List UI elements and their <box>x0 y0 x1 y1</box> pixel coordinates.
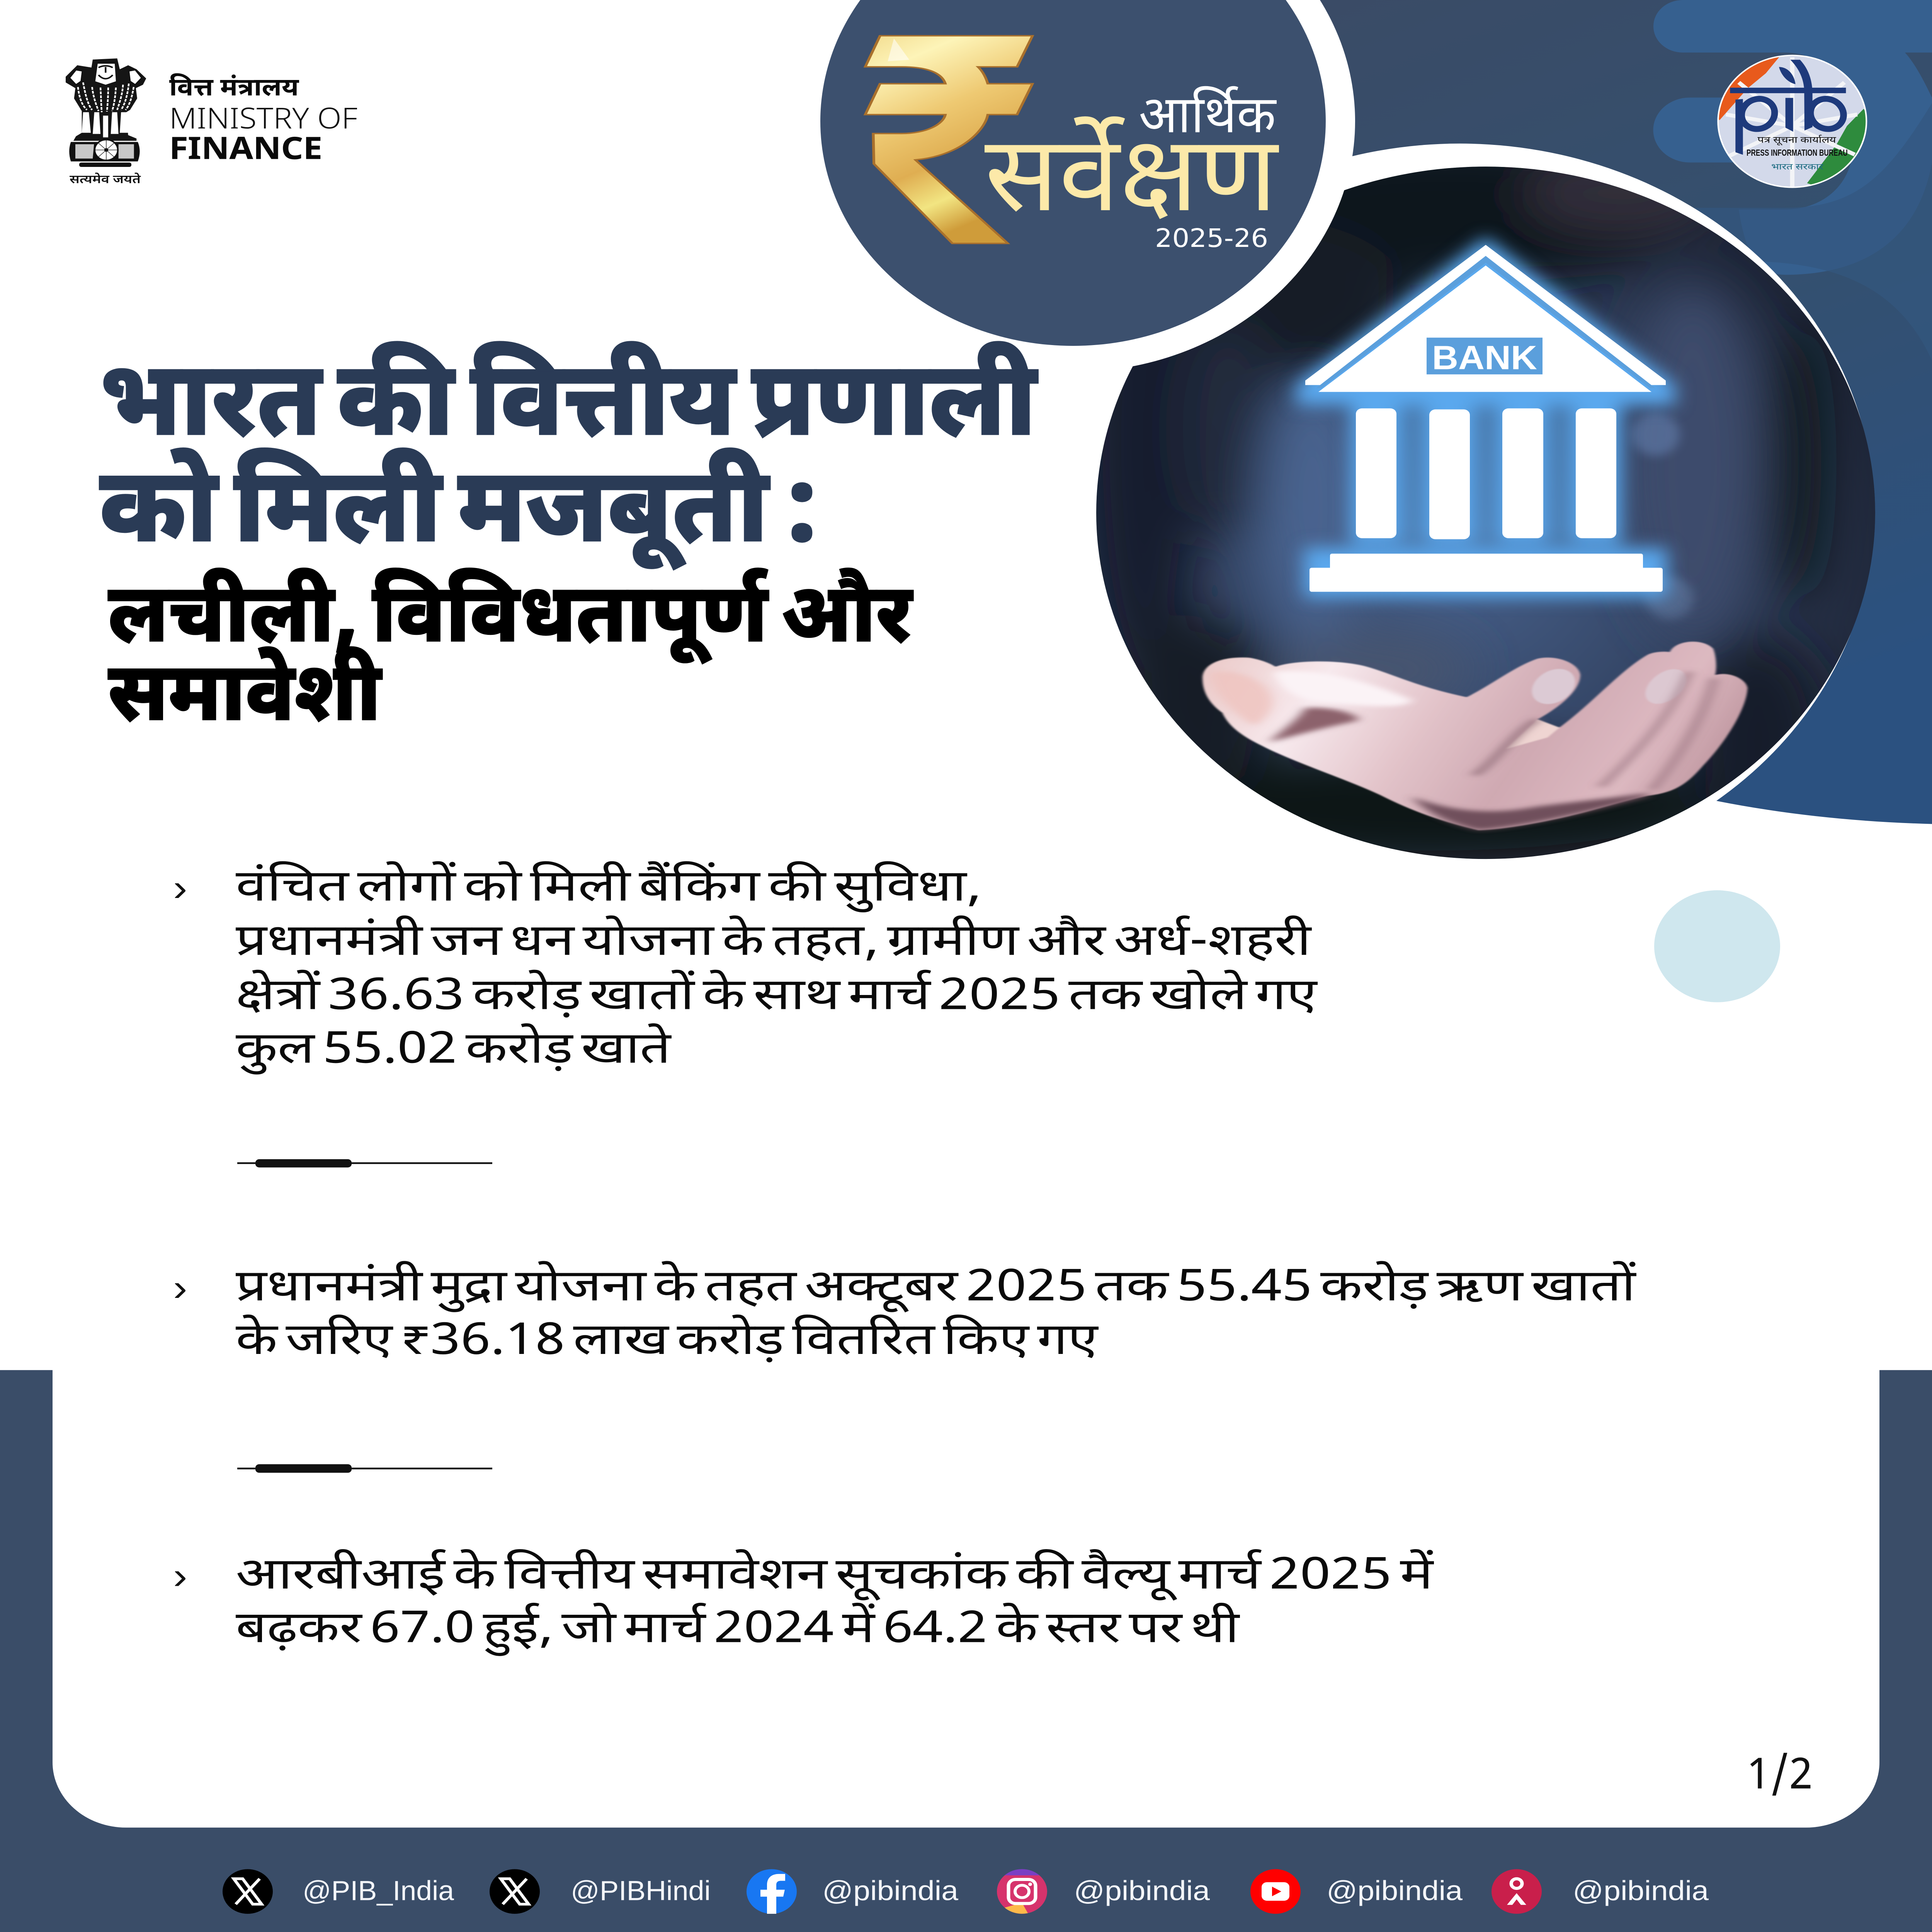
hand photo circle with bank icon <box>1086 141 1875 866</box>
hand shadows <box>1211 671 1714 830</box>
handle: Instagram <box>997 1869 1210 1914</box>
icon: national emblem <box>66 58 146 167</box>
social media footer <box>223 1869 1709 1914</box>
icon: golden rupee symbol <box>865 36 1032 243</box>
handle: X PIB_India: @PIB_India <box>303 1875 454 1906</box>
decorative pale circle <box>1654 890 1780 1002</box>
bullet 2: mudra yojana: के जरिए ₹36.18 लाख करोड़ वितरित किए गए <box>236 1315 1099 1372</box>
handle: Facebook <box>747 1869 959 1914</box>
handle: YouTube <box>1250 1869 1463 1914</box>
bullet 1: banking access: › <box>173 867 187 909</box>
year: 2025-26 <box>1155 223 1268 253</box>
bullet 3: financial inclusion index: › <box>173 1555 187 1597</box>
PIB logo: PRESS INFORMATION BUREAU <box>1747 148 1848 158</box>
subtitle: समावेशी <box>108 646 383 753</box>
bullet 1: banking access <box>173 861 1318 1081</box>
bullet 2: mudra yojana: › <box>173 1267 187 1309</box>
hand <box>1202 642 1747 830</box>
handle: Koo style app <box>1492 1869 1709 1914</box>
handle: X PIBHindi <box>490 1869 711 1914</box>
bullet 1: banking access: वंचित लोगों को मिली बैंकिंग की सुविधा, <box>236 861 981 919</box>
divider 1 <box>237 1159 492 1167</box>
ministry hindi name: वित्त मंत्रालय <box>169 73 299 105</box>
bullet 2: mudra yojana: प्रधानमंत्री मुद्रा योजना के तहत अक्टूबर 2025 तक 55.45 करोड़ ऋण खातों <box>236 1261 1637 1318</box>
bullet 3: financial inclusion index: आरबीआई के वित्तीय समावेशन सूचकांक की वैल्यू मार्च 2025 में <box>236 1549 1434 1607</box>
page number: 1/2 <box>1747 1750 1813 1806</box>
heading: aarthik: आर्थिक <box>1139 86 1277 153</box>
bullet 2: mudra yojana <box>173 1261 1637 1372</box>
subtitle <box>108 568 913 753</box>
bullet 1: banking access: क्षेत्रों 36.63 करोड़ खातों के साथ मार्च 2025 तक खोले गए <box>236 969 1318 1027</box>
budget circle badge <box>820 0 1326 346</box>
bullet 1: banking access: प्रधानमंत्री जन धन योजना के तहत, ग्रामीण और अर्ध-शहरी <box>236 915 1312 973</box>
bullet 1: banking access: कुल 55.02 करोड़ खाते <box>236 1024 672 1081</box>
PIB logo <box>1708 55 1881 195</box>
bullet 3: financial inclusion index <box>173 1549 1434 1660</box>
heading: sarvekshan: सर्वेक्षण <box>985 115 1281 253</box>
footer band and side margins <box>0 1340 1932 1932</box>
PIB logo: भारत सरकार <box>1771 163 1824 173</box>
handle: YouTube: @pibindia <box>1327 1875 1463 1906</box>
main title: को मिली मजबूती : <box>100 447 819 583</box>
main title <box>100 341 1039 583</box>
divider 2 <box>237 1464 492 1473</box>
PIB logo: पत्र सूचना कार्यालय <box>1757 134 1837 147</box>
handle: X PIBHindi: @PIBHindi <box>571 1875 711 1906</box>
subtitle: लचीली, विविधतापूर्ण और <box>108 568 913 674</box>
icon: bank building <box>1305 245 1666 592</box>
handle: Koo style app: @pibindia <box>1573 1875 1709 1906</box>
handle: Instagram: @pibindia <box>1074 1875 1210 1906</box>
main title: भारत की वित्तीय प्रणाली <box>100 341 1039 476</box>
finance: FINANCE <box>169 131 322 172</box>
icon: bank building: BANK <box>1432 339 1537 376</box>
glow behind bank <box>1296 237 1675 598</box>
ministry of: MINISTRY OF <box>169 103 357 140</box>
bullet 3: financial inclusion index: बढ़कर 67.0 हुई, जो मार्च 2024 में 64.2 के स्तर पर थी <box>236 1602 1240 1660</box>
handle: X PIB_India <box>223 1869 454 1914</box>
motto: सत्यमेव जयते <box>70 172 141 188</box>
Ministry of Finance logo <box>66 58 357 188</box>
blurred coat shapes <box>1086 141 1828 866</box>
white ring around hand photo <box>1046 144 1874 880</box>
handle: Facebook: @pibindia <box>822 1875 959 1906</box>
top right dark blue background with rupee pattern <box>1306 0 1932 824</box>
white ring around budget circle <box>791 0 1355 372</box>
